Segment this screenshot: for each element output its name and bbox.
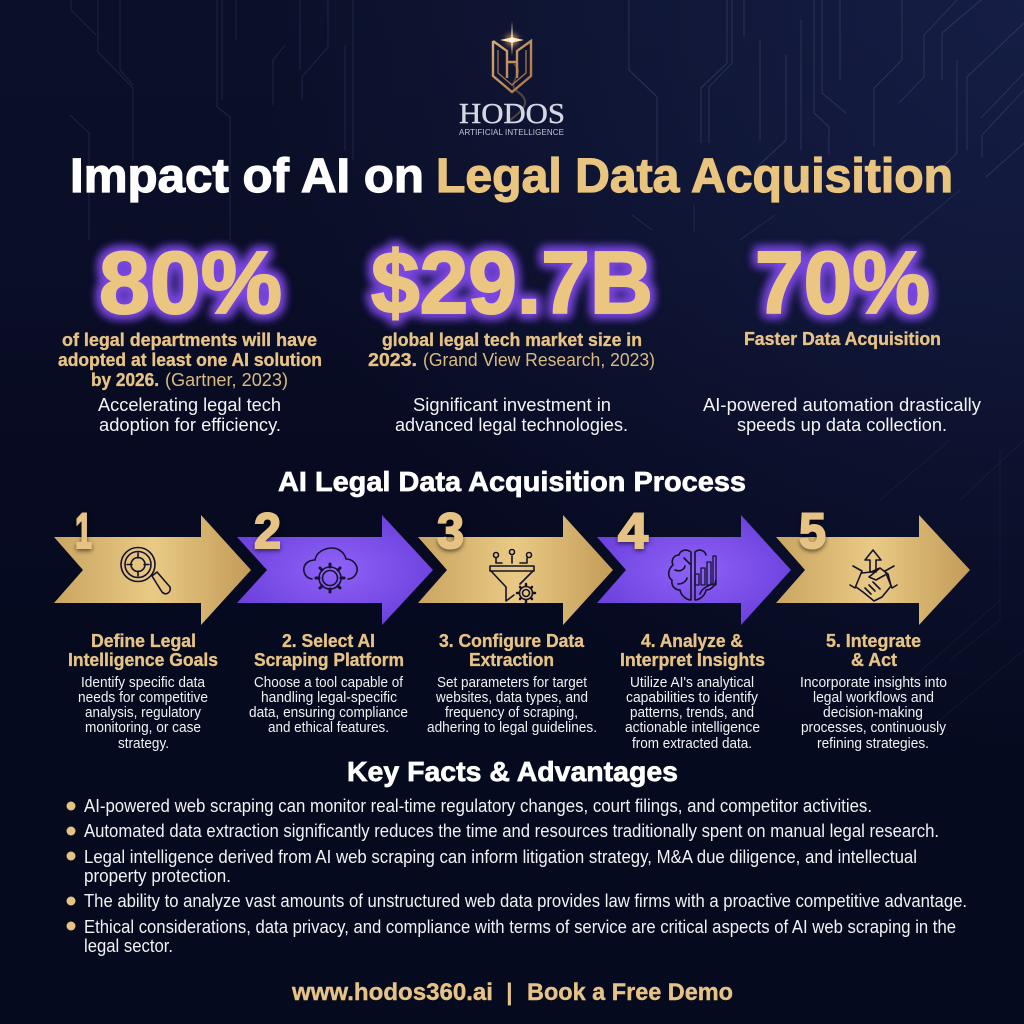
stat description: 2023. [368, 349, 417, 370]
step 1 text [68, 630, 218, 752]
step 5 text: 5. Integrate [826, 630, 921, 651]
stat number: $29.7B [371, 233, 653, 332]
step 1 text: Intelligence Goals [68, 649, 218, 670]
step number 4: 4 [618, 503, 648, 559]
bullet list: key facts [66, 796, 967, 956]
icon: cloud with gear [304, 548, 357, 592]
bullet 5: legal sector. [84, 936, 173, 956]
stat note: Accelerating legal tech [98, 394, 281, 415]
step 4 text: capabilities to identify [626, 689, 758, 706]
panel: stat $29.7B [368, 233, 655, 435]
step 4 text: patterns, trends, and [630, 704, 754, 721]
stat note [98, 394, 281, 435]
step 3 text [427, 630, 597, 736]
step 3 text: 3. Configure Data [439, 630, 585, 651]
step 5 text: decision-making [823, 704, 923, 721]
step 4 text: 4. Analyze & [641, 630, 743, 651]
step 1 text: Define Legal [91, 630, 196, 651]
logo wordmark: HODOS [459, 98, 565, 130]
bullet 4: The ability to analyze vast amounts of unstructured web data provides law firms with a proactive competitive advantage. [84, 891, 967, 911]
stat note [703, 394, 982, 435]
step 3 text: Extraction [469, 649, 554, 670]
step number 2: 2 [254, 503, 281, 559]
icon: target magnifier [121, 548, 170, 594]
heading: key facts: Key Facts & Advantages [347, 756, 678, 787]
step 5 text: Incorporate insights into [800, 674, 947, 691]
step 3 text: adhering to legal guidelines. [427, 719, 597, 736]
stat description: Faster Data Acquisition [744, 328, 941, 349]
step 2 text: Choose a tool capable of [254, 674, 404, 691]
step 1 text: analysis, regulatory [85, 704, 201, 721]
step 3 text: Set parameters for target [437, 674, 588, 691]
stat description: (Gartner, 2023) [165, 369, 288, 390]
stat note: advanced legal technologies. [395, 414, 628, 435]
step 4 text [620, 630, 765, 752]
icon: handshake with up arrow [850, 550, 897, 601]
bullet 5 [66, 917, 956, 956]
step 2 text [249, 630, 408, 736]
heading: process: AI Legal Data Acquisition Process [278, 466, 746, 497]
stat description: of legal departments will have [62, 329, 317, 350]
bullet 3: Legal intelligence derived from AI web scraping can inform litigation strategy, M&A due diligence, and intellectual [84, 847, 917, 867]
stat number: 70% [755, 233, 930, 332]
step 4 text: actionable intelligence [625, 719, 760, 736]
step 4 text: from extracted data. [632, 735, 752, 752]
title [70, 150, 953, 203]
panel: stat 70% [703, 233, 982, 435]
bullet 3 [66, 847, 917, 886]
stat description [58, 329, 322, 390]
bullet 2: Automated data extraction significantly reduces the time and resources traditionally spent on manual legal research. [84, 821, 939, 841]
step 4 text: Utilize AI's analytical [630, 674, 754, 691]
bullet 3: property protection. [84, 866, 231, 886]
icon: funnel with gear [490, 550, 535, 602]
icon: shield monogram with star [493, 21, 531, 122]
step 1 text: needs for competitive [78, 689, 208, 706]
step 5 text: & Act [851, 649, 897, 670]
step 2 text: and ethical features. [268, 719, 389, 736]
arrow 3 [418, 515, 613, 625]
step 3 text: websites, data types, and [435, 689, 588, 706]
stat description [368, 329, 655, 370]
arrow 1 [54, 515, 251, 625]
logo: Hodos Artificial Intelligence [459, 21, 565, 137]
stat note: adoption for efficiency. [99, 414, 281, 435]
step 1 text: monitoring, or case [85, 719, 201, 736]
bullet 5: Ethical considerations, data privacy, and compliance with terms of service are critical aspects of AI web scraping in the [84, 917, 956, 937]
footer call to action: Book a Free Demo [527, 979, 733, 1006]
stat description: (Grand View Research, 2023) [423, 349, 655, 370]
step 5 text: legal workflows and [813, 689, 934, 706]
stat description: adopted at least one AI solution [58, 349, 322, 370]
step 2 text: Scraping Platform [254, 649, 404, 670]
title: Impact of AI on [70, 150, 424, 203]
footer call to action: www.hodos360.ai [291, 979, 493, 1006]
arrow 2 [237, 515, 433, 625]
stat note [395, 394, 628, 435]
logo tagline: ARTIFICIAL INTELLIGENCE [459, 128, 564, 137]
bullet 1: AI-powered web scraping can monitor real-time regulatory changes, court filings, and competitor activities. [84, 796, 872, 816]
step 2 text: handling legal-specific [261, 689, 397, 706]
stat description: global legal tech market size in [382, 329, 642, 350]
icon: brain with bars [669, 550, 716, 600]
panel: stat 80% [58, 233, 322, 435]
arrow 4 [597, 515, 791, 625]
title: Legal Data Acquisition [436, 150, 953, 203]
stat description: by 2026. [91, 369, 159, 390]
stat note: AI-powered automation drastically [703, 394, 982, 415]
step 5 text: refining strategies. [817, 735, 929, 752]
stat note: Significant investment in [413, 394, 611, 415]
arrow 5 [776, 515, 970, 625]
step 1 text: strategy. [118, 735, 169, 752]
step 5 text [800, 630, 947, 752]
footer call to action [291, 979, 733, 1006]
step 5 text: processes, continuously [801, 719, 946, 736]
step number 3: 3 [437, 503, 464, 559]
footer call to action: | [506, 979, 513, 1006]
step 4 text: Interpret Insights [620, 649, 765, 670]
step 2 text: 2. Select AI [282, 630, 375, 651]
step number 1: 1 [75, 503, 92, 559]
stat number: 80% [99, 233, 282, 332]
step number 5: 5 [799, 503, 826, 559]
step 1 text: Identify specific data [81, 674, 206, 691]
step 3 text: frequency of scraping, [445, 704, 578, 721]
stat note: speeds up data collection. [737, 414, 947, 435]
step 2 text: data, ensuring compliance [249, 704, 408, 721]
